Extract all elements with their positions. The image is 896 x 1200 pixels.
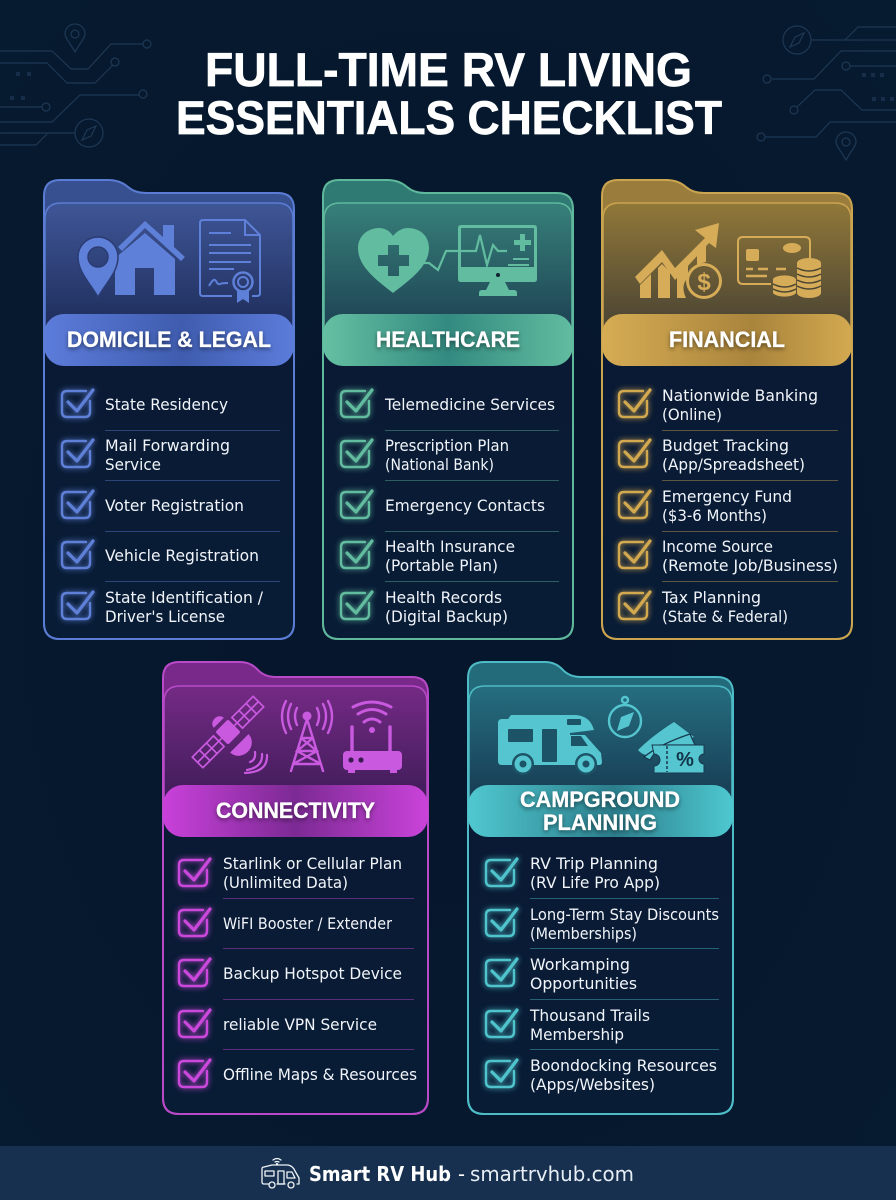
title (176, 43, 722, 144)
item: Voter Registration: Voter Registration (105, 496, 244, 515)
icon: pin, house and document (78, 220, 260, 303)
icon: motorhome, compass and tickets: % (676, 749, 694, 771)
item: Prescription Plan: (National Bank) (385, 455, 494, 474)
item: Nationwide Banking: Nationwide Banking (662, 386, 818, 405)
panel: domicile and legal (44, 180, 294, 639)
folder shape (602, 180, 852, 639)
item: Starlink or Cellular Plan (179, 854, 402, 892)
background circuit decoration left (0, 24, 151, 147)
item: State Identification: State Identification / (105, 588, 264, 607)
item: Income Source: Income Source (662, 537, 773, 556)
heading pill: CONNECTIVITY (216, 798, 375, 823)
item: Emergency Fund (619, 487, 792, 525)
item: Offline Maps and Resources: Offline Maps & Resources (223, 1065, 417, 1084)
icon: growth chart, coin, card and coin stacks: $ (697, 269, 711, 296)
item: Starlink or Cellular Plan: Starlink or Cellular Plan (223, 854, 402, 873)
item: Workamping Opportunities (486, 955, 637, 993)
folder shape (44, 180, 294, 639)
item: Health Records: (Digital Backup) (385, 607, 508, 626)
checklist (62, 390, 280, 626)
item: Long-Term Stay Discounts (486, 905, 719, 943)
item: Nationwide Banking: (Online) (662, 405, 722, 424)
item: Health Records: Health Records (385, 588, 502, 607)
item: Thousand Trails Membership: Thousand Trails (529, 1006, 650, 1025)
item: Thousand Trails Membership: Membership (530, 1025, 624, 1044)
title: ESSENTIALS CHECKLIST (176, 91, 722, 144)
footer text: - (458, 1162, 465, 1186)
item: Tax Planning (619, 588, 788, 626)
item: Long-Term Stay Discounts: Long-Term Stay Discounts (530, 905, 719, 924)
item: reliable VPN Service: reliable VPN Service (223, 1015, 377, 1034)
heading pill: FINANCIAL (669, 327, 785, 352)
item: Voter Registration (62, 491, 244, 518)
item: WiFI Booster / Extender: WiFI Booster / Extender (223, 914, 392, 933)
item: Tax Planning: Tax Planning (661, 588, 761, 607)
item: Workamping Opportunities: Workamping (530, 955, 630, 974)
item: Mail Forwarding Service (62, 436, 230, 474)
item: RV Trip Planning: (RV Life Pro App) (530, 873, 660, 892)
item: Budget Tracking: Budget Tracking (662, 436, 789, 455)
item: State Identification (62, 588, 264, 626)
item: State Residency: State Residency (105, 395, 228, 414)
item: Health Records (341, 588, 508, 626)
heading pill (602, 314, 852, 366)
item: Thousand Trails Membership (486, 1006, 650, 1044)
checklist (179, 854, 417, 1087)
heading pill: CAMPGROUND (520, 787, 680, 812)
item: Telemedicine Services: Telemedicine Services (384, 395, 555, 414)
item: Nationwide Banking (619, 386, 818, 424)
footer bar (0, 1146, 896, 1200)
checklist (341, 390, 559, 626)
item: Budget Tracking (619, 436, 805, 474)
item: Prescription Plan: Prescription Plan (385, 436, 509, 455)
panel: healthcare (323, 180, 573, 639)
heading pill (468, 785, 733, 837)
icon: heart and monitor (358, 225, 537, 296)
item: Boondocking Resources: (Apps/Websites) (530, 1075, 655, 1094)
panel: campground planning (468, 662, 733, 1114)
panel: connectivity (163, 662, 428, 1114)
item: Long-Term Stay Discounts: (Memberships) (530, 924, 637, 943)
item: WiFI Booster / Extender (179, 909, 392, 936)
item: Offline Maps and Resources (179, 1060, 417, 1087)
item: reliable VPN Service (179, 1010, 377, 1037)
item: Health Insurance (341, 537, 515, 575)
item: Mail Forwarding Service: Service (105, 455, 161, 474)
item: Workamping Opportunities: Opportunities (530, 974, 637, 993)
icon: satellite, tower and router (184, 688, 402, 782)
panel: financial (602, 180, 852, 639)
item: RV Trip Planning (486, 854, 660, 892)
footer text (309, 1162, 634, 1186)
item: Income Source (619, 537, 838, 575)
folder shape (163, 662, 428, 1114)
item: Tax Planning: (State & Federal) (662, 607, 788, 626)
item: State Identification: Driver's License (105, 607, 225, 626)
heading pill: HEALTHCARE (376, 327, 520, 352)
folder shape (323, 180, 573, 639)
item: Budget Tracking: (App/Spreadsheet) (662, 455, 805, 474)
item: Health Insurance: Health Insurance (385, 537, 515, 556)
heading pill: DOMICILE & LEGAL (67, 327, 271, 352)
item: Emergency Contacts (341, 491, 545, 518)
checklist (619, 386, 838, 626)
heading pill (44, 314, 294, 366)
heading pill (163, 785, 428, 837)
footer text: smartrvhub.com (470, 1162, 634, 1186)
item: Prescription Plan (341, 436, 509, 474)
footer text: Smart RV Hub (309, 1162, 451, 1186)
item: Backup Hotspot Device: Backup Hotspot Device (223, 964, 402, 983)
background circuit decoration right (757, 26, 896, 160)
item: Backup Hotspot Device (179, 959, 402, 986)
item: Boondocking Resources (486, 1056, 717, 1094)
item: State Residency (62, 390, 228, 417)
item: Emergency Contacts: Emergency Contacts (385, 496, 545, 515)
item: Telemedicine Services (341, 390, 555, 417)
item: Vehicle Registration: Vehicle Registration (105, 546, 259, 565)
title: FULL-TIME RV LIVING (205, 43, 692, 96)
item: Vehicle Registration (62, 541, 259, 568)
item: Income Source: (Remote Job/Business) (662, 556, 838, 575)
item: Emergency Fund: ($3-6 Months) (662, 506, 767, 525)
item: Emergency Fund: Emergency Fund (662, 487, 792, 506)
icon: growth chart, coin, card and coin stacks (635, 223, 821, 299)
checklist (486, 854, 719, 1094)
item: Starlink or Cellular Plan: (Unlimited Data) (223, 873, 348, 892)
heading pill: PLANNING (543, 810, 657, 835)
icon: footer motorhome with wifi (262, 1158, 299, 1188)
item: Health Insurance: (Portable Plan) (385, 556, 498, 575)
folder shape (468, 662, 733, 1114)
heading pill (323, 314, 573, 366)
item: Boondocking Resources: Boondocking Resources (530, 1056, 717, 1075)
item: RV Trip Planning: RV Trip Planning (530, 854, 658, 873)
item: Mail Forwarding Service: Mail Forwarding (105, 436, 230, 455)
icon: motorhome, compass and tickets (498, 697, 704, 775)
